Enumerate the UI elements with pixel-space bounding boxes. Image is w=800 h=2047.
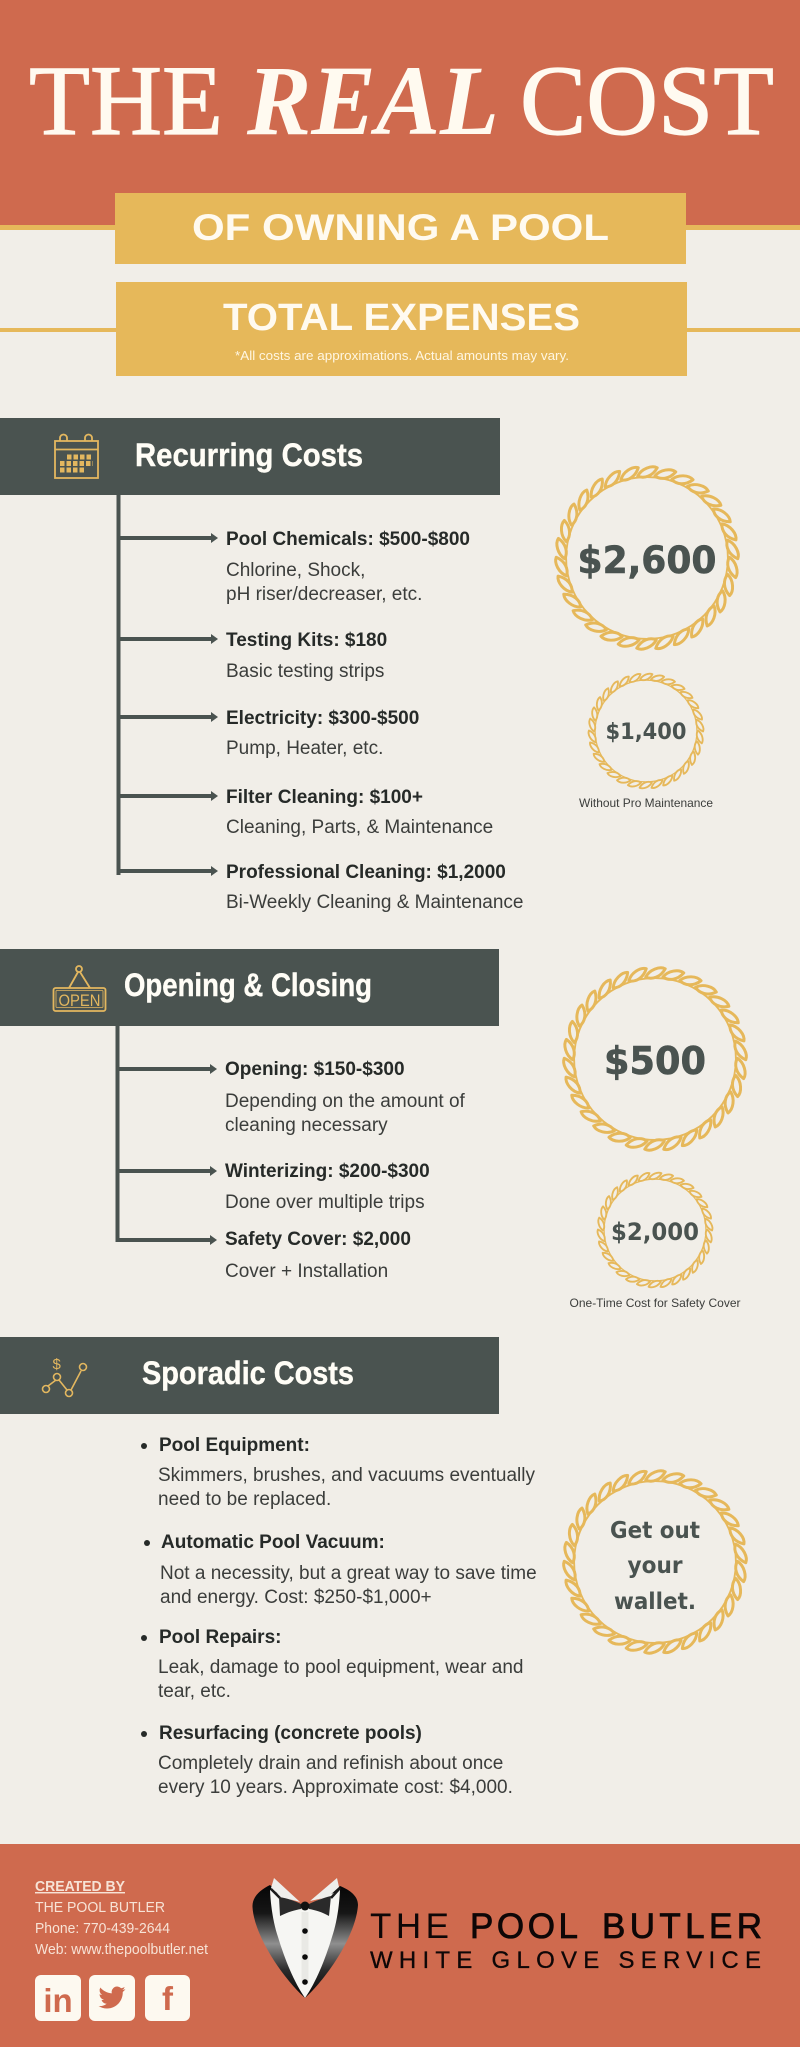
icon: linkedin	[35, 1975, 81, 2021]
callout: $1,400	[573, 662, 719, 810]
banner: total expenses	[116, 282, 687, 376]
banner: total expenses: TOTAL EXPENSES	[223, 297, 580, 339]
item: safety cover: Cover + Installation	[225, 1261, 388, 1282]
recurring costs heading: Recurring Costs	[135, 437, 363, 473]
item: automatic pool vacuum	[144, 1532, 537, 1608]
item: pool repairs: tear, etc.	[158, 1681, 231, 1702]
item: winterizing: Winterizing: $200-$300	[225, 1161, 430, 1182]
sporadic costs heading: Sporadic Costs	[142, 1355, 354, 1391]
callout: $2,000: One-Time Cost for Safety Cover	[570, 1296, 740, 1310]
item: professional cleaning	[226, 862, 523, 913]
item: opening: cleaning necessary	[225, 1115, 388, 1136]
item: resurfacing: Completely drain and refinish about once	[158, 1753, 503, 1774]
callout: $2,000	[570, 1161, 740, 1310]
item: winterizing	[225, 1161, 430, 1213]
gold stripe under header	[0, 225, 800, 230]
item: pool equipment: Pool Equipment:	[159, 1435, 310, 1456]
icon: calendar	[55, 434, 98, 478]
item: electricity: Electricity: $300-$500	[226, 708, 419, 729]
item: testing kits	[226, 630, 387, 682]
contact details	[35, 1879, 208, 1958]
panel: sporadic costs	[0, 1337, 771, 1798]
icon: linkedin: in	[43, 1982, 73, 2019]
banner: total expenses: *All costs are approximations. Actual amounts may vary.	[235, 348, 569, 363]
contact details: CREATED BY	[35, 1879, 125, 1895]
icon: open sign: OPEN	[58, 991, 100, 1010]
icon: price trend	[42, 1356, 86, 1396]
panel: recurring costs	[0, 418, 763, 913]
item: pool chemicals: Chlorine, Shock,	[226, 560, 365, 581]
title: THE	[29, 45, 223, 156]
subtitle banner: of owning a pool	[115, 193, 686, 264]
subtitle banner: of owning a pool: OF OWNING A POOL	[192, 207, 609, 248]
gold stripe behind total expenses	[0, 328, 800, 332]
logo: wordmark: WHITE GLOVE SERVICE	[370, 1947, 761, 1974]
opening and closing header bar	[0, 949, 499, 1026]
item: electricity: Pump, Heater, etc.	[226, 738, 383, 759]
contact details: THE POOL BUTLER	[35, 1900, 165, 1916]
logo: wordmark: THE	[370, 1907, 449, 1946]
logo: wordmark	[370, 1907, 762, 1974]
contact details: Web: www.thepoolbutler.net	[35, 1942, 208, 1958]
item: pool equipment: Skimmers, brushes, and vacuums eventually	[158, 1465, 535, 1486]
item: professional cleaning: Bi-Weekly Cleaning & Maintenance	[226, 892, 523, 913]
callout: $2,000: $2,000	[611, 1218, 699, 1246]
item: pool chemicals	[226, 529, 470, 605]
callout: $2,600	[531, 448, 763, 668]
item: professional cleaning: Professional Cleaning: $1,2000	[226, 862, 506, 883]
item: testing kits: Testing Kits: $180	[226, 630, 387, 651]
logo: wordmark: POOL	[470, 1907, 578, 1946]
tree connector	[116, 495, 218, 876]
item: pool equipment	[141, 1435, 535, 1510]
callout: $1,400: $1,400	[606, 720, 686, 745]
item: pool chemicals: Pool Chemicals: $500-$800	[226, 529, 470, 550]
item: pool repairs: Leak, damage to pool equipment, wear and	[158, 1657, 523, 1678]
title	[29, 45, 774, 156]
icon: facebook: f	[162, 1980, 174, 2017]
logo: tuxedo	[252, 1878, 358, 1998]
item: electricity	[226, 708, 419, 759]
icon: twitter	[89, 1975, 135, 2021]
callout: $500	[539, 949, 771, 1169]
icon: open sign	[54, 966, 106, 1011]
callout: $500: $500	[604, 1039, 706, 1083]
item: resurfacing	[141, 1723, 513, 1798]
item: automatic pool vacuum: Not a necessity, but a great way to save time	[160, 1563, 537, 1584]
tree connector	[116, 1026, 217, 1245]
item: opening: Opening: $150-$300	[225, 1059, 405, 1080]
item: filter cleaning: Cleaning, Parts, & Maintenance	[226, 817, 493, 838]
callout: get out your wallet	[539, 1452, 771, 1672]
item: automatic pool vacuum: and energy. Cost: $250-$1,000+	[160, 1587, 432, 1608]
contact details: Phone: 770-439-2644	[35, 1921, 170, 1937]
item: filter cleaning: Filter Cleaning: $100+	[226, 787, 423, 808]
item: pool repairs	[141, 1627, 523, 1702]
item: safety cover	[225, 1229, 411, 1282]
item: resurfacing: every 10 years. Approximate cost: $4,000.	[158, 1777, 513, 1798]
item: pool repairs: Pool Repairs:	[159, 1627, 281, 1648]
title: COST	[520, 45, 774, 156]
sporadic costs header bar	[0, 1337, 499, 1414]
callout: get out your wallet: wallet.	[614, 1589, 696, 1615]
item: pool chemicals: pH riser/decreaser, etc.	[226, 584, 422, 605]
callout: get out your wallet: your	[628, 1553, 683, 1579]
opening and closing heading: Opening & Closing	[124, 967, 372, 1003]
item: automatic pool vacuum: Automatic Pool Vacuum:	[161, 1532, 385, 1553]
item: resurfacing: Resurfacing (concrete pools)	[159, 1723, 422, 1744]
logo: wordmark: BUTLER	[602, 1907, 762, 1946]
item: pool equipment: need to be replaced.	[158, 1489, 331, 1510]
title: REAL	[246, 45, 499, 156]
item: filter cleaning	[226, 787, 493, 838]
footer band	[0, 1844, 800, 2047]
icon: price trend: $	[52, 1356, 62, 1373]
callout: $2,600: $2,600	[578, 539, 716, 582]
item: opening	[225, 1059, 466, 1136]
item: winterizing: Done over multiple trips	[225, 1192, 425, 1213]
icon: facebook	[145, 1975, 190, 2021]
callout: $1,400: Without Pro Maintenance	[579, 796, 713, 810]
callout: get out your wallet: Get out	[610, 1518, 700, 1544]
item: testing kits: Basic testing strips	[226, 661, 384, 682]
panel: opening and closing	[0, 949, 771, 1310]
item: safety cover: Safety Cover: $2,000	[225, 1229, 411, 1250]
recurring costs header bar	[0, 418, 500, 495]
item: opening: Depending on the amount of	[225, 1091, 466, 1112]
header band	[0, 0, 800, 225]
panel: footer	[0, 1844, 800, 2047]
